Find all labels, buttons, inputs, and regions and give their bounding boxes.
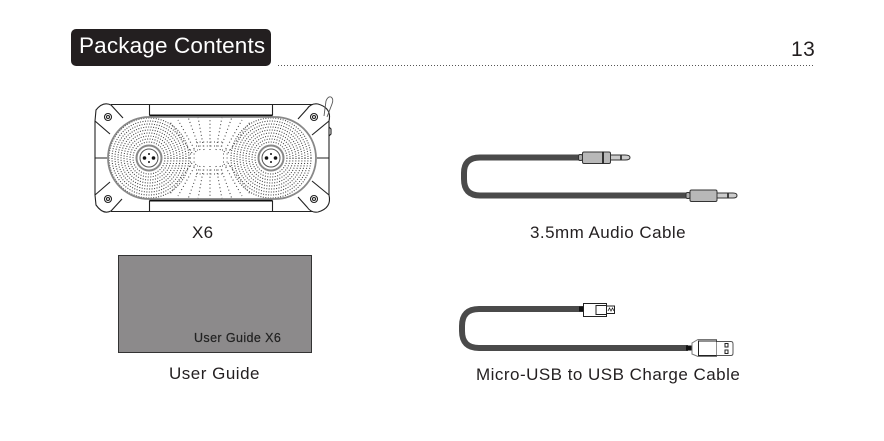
page number: 13 [791, 38, 815, 61]
icon: X6 speaker [94, 96, 334, 213]
dotted header rule [278, 65, 813, 66]
heading: Package Contents: Package Contents [79, 33, 265, 58]
heading: Package Contents [71, 29, 271, 66]
label: User Guide: User Guide [169, 364, 260, 383]
icon: user guide booklet [118, 255, 312, 353]
booklet title: User Guide X6 [194, 331, 281, 345]
label: X6: X6 [192, 223, 213, 242]
icon: 3.5mm audio cable [461, 152, 738, 202]
icon: micro-USB to USB cable [459, 303, 734, 357]
label: Micro-USB to USB Charge Cable: Micro-USB to USB Charge Cable [476, 365, 740, 384]
label: 3.5mm Audio Cable: 3.5mm Audio Cable [530, 223, 686, 242]
